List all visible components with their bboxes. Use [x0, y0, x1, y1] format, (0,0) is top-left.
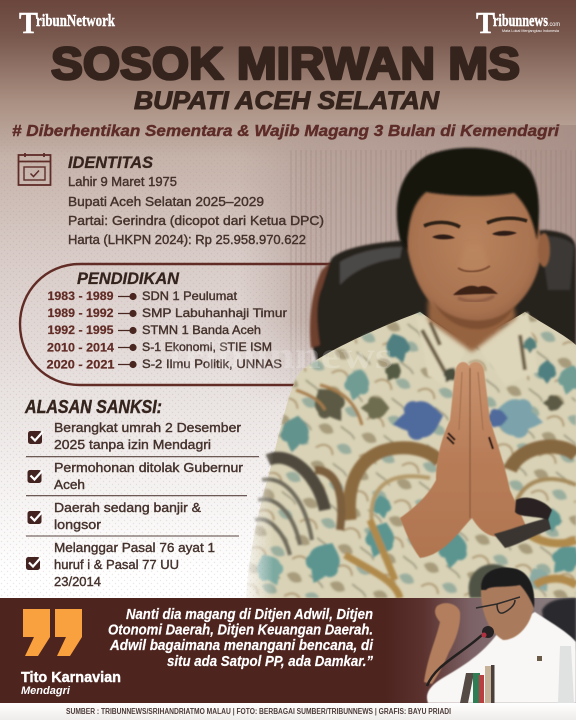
timeline years: 1983 - 1989: [48, 289, 114, 303]
shirt body: [246, 312, 576, 598]
checklist text: huruf i & Pasal 77 UU: [54, 557, 179, 572]
timeline connectors: [118, 294, 136, 368]
quote text: Otonomi Daerah, Ditjen Keuangan Daerah.: [108, 622, 373, 638]
logo: TribunNetwork: T: [19, 5, 38, 40]
timeline years: 1989 - 1992: [48, 306, 114, 320]
speaker name: Tito Karnavian: [21, 669, 121, 686]
neck: [428, 300, 516, 352]
logo: TribunNetwork: [19, 5, 115, 40]
logo: Tribunnews: .com: [548, 22, 560, 28]
checklist text: longsor: [54, 517, 102, 532]
logo: Tribunnews: [476, 5, 560, 40]
text block: identity details: [68, 175, 324, 247]
panel: identitas: [68, 153, 324, 247]
checklist text: Aceh: [54, 477, 85, 492]
face: [406, 172, 550, 329]
timeline years: 2010 - 2014: [47, 340, 114, 354]
timeline years: [46, 289, 115, 372]
logo: TribunNetwork: ribunNetwork: [36, 11, 115, 30]
checklist text: Permohonan ditolak Gubernur: [54, 460, 244, 475]
checklist text: 2025 tanpa izin Mendagri: [54, 437, 211, 452]
white shirt: [427, 612, 576, 703]
logo: Tribunnews: ribunnews: [493, 11, 548, 30]
quote text: situ ada Satpol PP, ada Damkar.”: [167, 653, 373, 670]
watermark: tribunnews: tribunnews: [168, 335, 393, 377]
quote text: [108, 606, 374, 670]
panel: alasan sanksi: [24, 397, 259, 589]
background curtain: [240, 125, 576, 405]
text block: identity details: Bupati Aceh Selatan 2025–2029: [68, 195, 264, 209]
panel: pendidikan: [20, 264, 335, 385]
arm: [424, 603, 460, 684]
brows and eyes: [424, 218, 527, 239]
logo: Tribunnews: Mata Lokal Menjangkau Indonesia: [502, 29, 559, 33]
heading: alasan sanksi: ALASAN SANKSI:: [24, 397, 162, 417]
checklist text: Daerah sedang banjir &: [54, 500, 201, 515]
timeline years: 2020 - 2021: [46, 358, 115, 372]
timeline years: 1992 - 1995: [48, 323, 114, 337]
checklist text: [54, 420, 244, 589]
panel: quote band: [0, 568, 576, 703]
collar: [416, 312, 538, 390]
timeline schools: S-1 Ekonomi, STIE ISM: [142, 340, 272, 354]
footer background: [0, 703, 576, 720]
text block: identity details: Harta (LHKPN 2024): Rp 25.958.970.622: [68, 233, 306, 247]
heading: pendidikan: PENDIDIKAN: [77, 269, 180, 288]
pins and pens: [460, 656, 542, 703]
band background: [0, 598, 576, 703]
checklist text: 23/2014: [54, 574, 101, 589]
title: SOSOK MIRWAN MS: [51, 38, 520, 89]
quote text: Nanti dia magang di Ditjen Adwil, Ditjen: [126, 606, 373, 623]
checklist text: Melanggar Pasal 76 ayat 1: [54, 540, 215, 555]
hashtag headline: # Diberhentikan Sementara & Wajib Magang 3 Bulan di Kemendagri: [12, 123, 560, 140]
quote text: Adwil bagaimana menangani bencana, di: [109, 637, 374, 654]
head: [397, 148, 550, 329]
hair: [397, 148, 539, 250]
icon: check boxes: [26, 431, 43, 570]
photo: Mirwan MS: [246, 148, 576, 598]
checklist dividers: [26, 457, 259, 536]
dark chair: [542, 598, 576, 650]
office chair: [310, 230, 576, 372]
subtitle: BUPATI ACEH SELATAN: [134, 87, 440, 115]
timeline schools: S-2 Ilmu Politik, UNNAS: [142, 357, 282, 371]
glass: [558, 646, 574, 703]
text block: identity details: Lahir 9 Maret 1975: [68, 175, 177, 189]
text block: identity details: Partai: Gerindra (dicopot dari Ketua DPC): [68, 214, 324, 228]
timeline schools: [142, 289, 287, 371]
logo: Tribunnews: T: [476, 5, 495, 40]
speaker role: Mendagri: [21, 685, 71, 697]
timeline schools: SDN 1 Peulumat: [142, 289, 238, 303]
pendidikan rounded frame: [20, 264, 335, 385]
wristwatch: [494, 498, 552, 548]
rings: [447, 433, 493, 449]
praying hands: [400, 362, 527, 558]
timeline schools: STMN 1 Banda Aceh: [142, 323, 261, 337]
heading: identitas: IDENTITAS: [68, 153, 154, 172]
mouth: [453, 286, 498, 295]
icon: quotation mark: [23, 609, 82, 656]
checklist text: Berangkat umrah 2 Desember: [54, 420, 242, 435]
batik pattern: [246, 312, 576, 598]
footer credits: SUMBER : TRIBUNNEWS/SRIHANDRIATMO MALAU | FOTO: BERBAGAI SUMBER/TRIBUNNEWS | GRAFIS: BAYU PRIADI: [66, 707, 451, 716]
head: [476, 568, 534, 640]
timeline schools: SMP Labuhanhaji Timur: [142, 306, 287, 320]
icon: calendar check: [18, 153, 50, 185]
photo: Tito Karnavian: [385, 568, 576, 703]
background dot texture: [0, 130, 330, 600]
microphone: [427, 635, 482, 686]
nose: [460, 245, 488, 272]
